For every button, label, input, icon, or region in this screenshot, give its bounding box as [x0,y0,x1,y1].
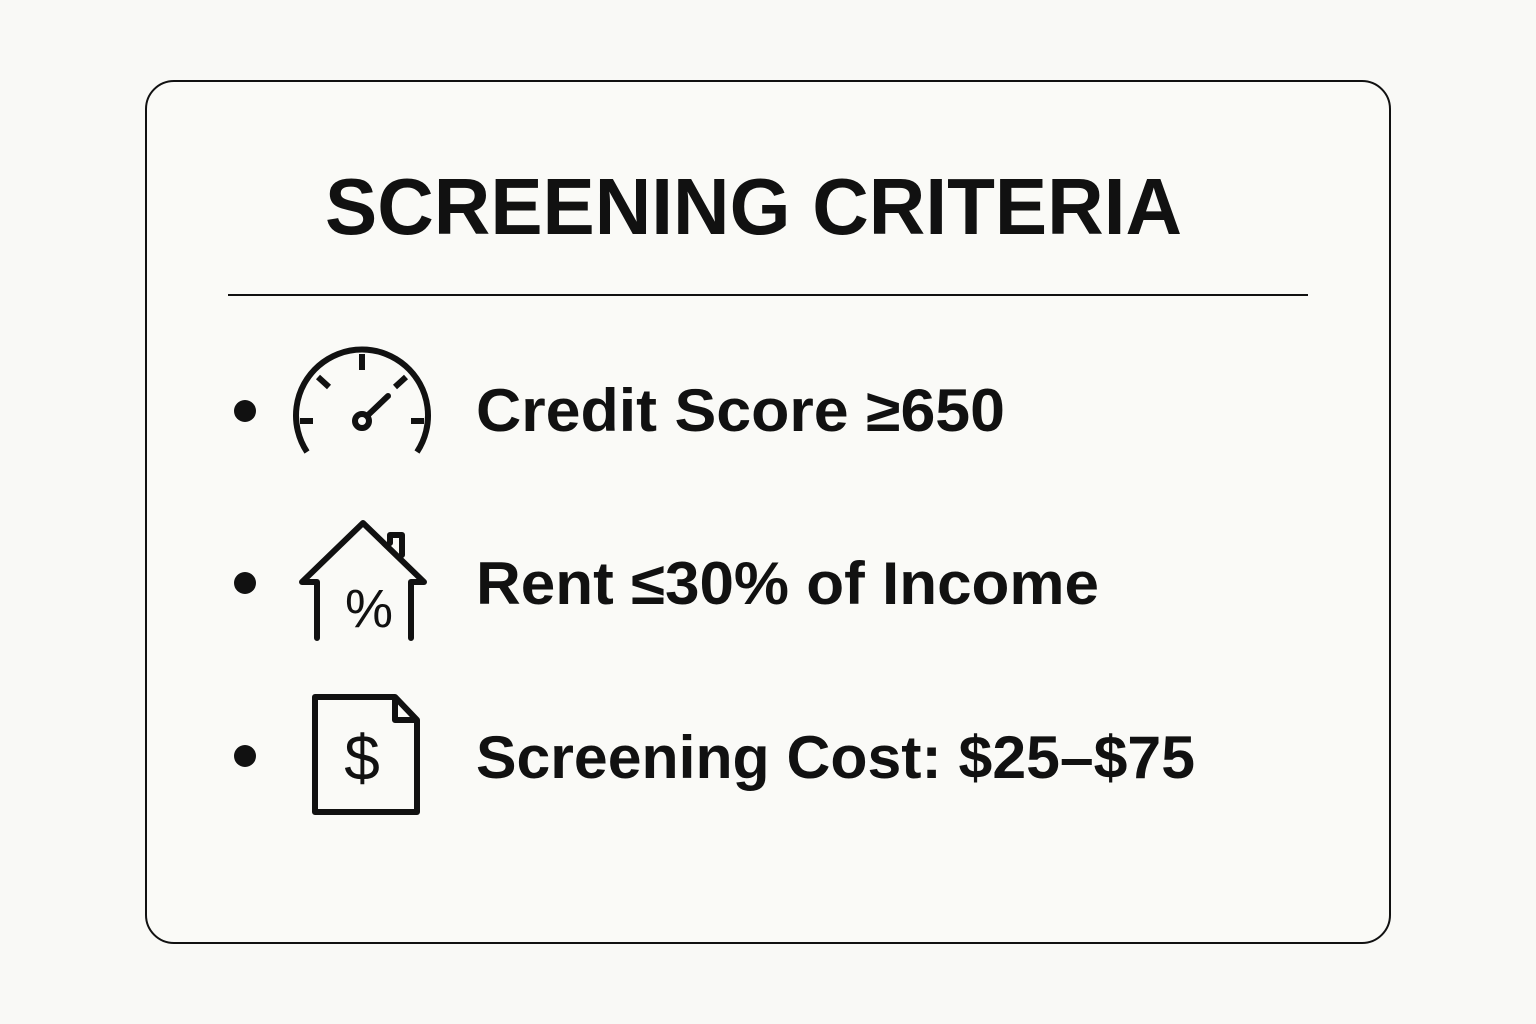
icon: document with dollar: $ [344,722,380,794]
item: credit score: Credit Score ≥650 [476,377,1005,444]
item: screening cost [234,697,1195,812]
title: SCREENING CRITERIA [325,162,1182,251]
item: screening cost: Screening Cost: $25–$75 [476,724,1195,791]
icon: document with dollar [315,697,417,812]
item: credit score [234,350,1005,452]
icon: house with percent: % [345,579,393,639]
item: rent [234,523,1099,639]
panel: screening criteria card [146,81,1390,943]
icon: house with percent [302,523,424,639]
icon: gauge [296,350,428,452]
item: rent: Rent ≤30% of Income [476,550,1099,617]
